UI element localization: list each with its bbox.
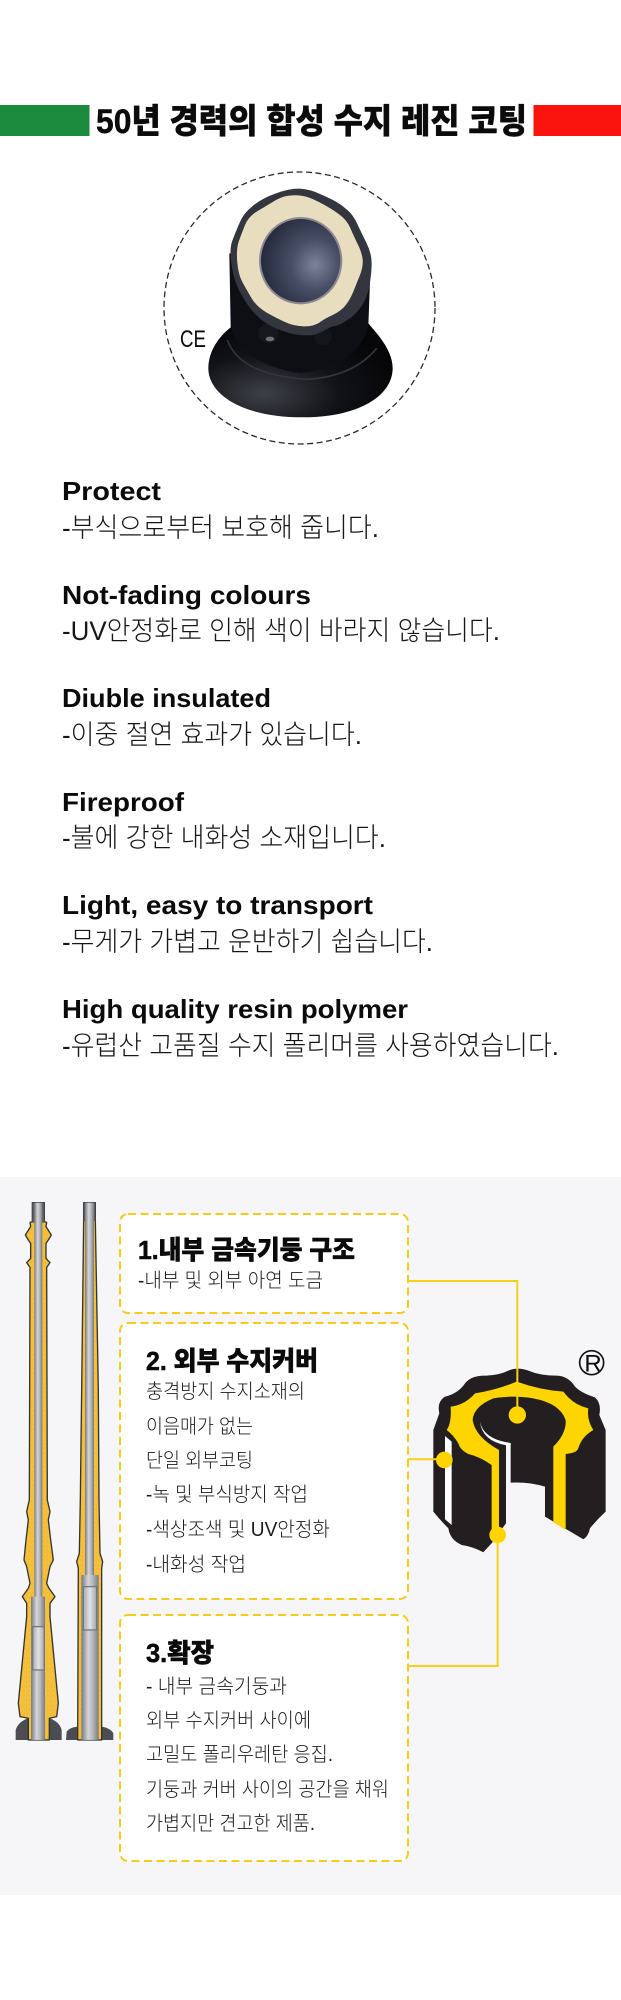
callout box 2: outer resin cover: [120, 1323, 408, 1599]
registered mark: [580, 1351, 604, 1375]
feature: Light, easy to transport: -무게가 가볍고 운반하기 쉽습니다.: [62, 927, 433, 957]
feature: Protect: -부식으로부터 보호해 줍니다.: [62, 513, 379, 543]
CE mark: CE: [180, 326, 206, 353]
feature: Light, easy to transport: [62, 890, 433, 957]
callout box 2: outer resin cover: 이음매가 없는: [146, 1415, 253, 1438]
feature: Light, easy to transport: Light, easy to transport: [62, 890, 373, 920]
feature: Not-fading colours: -UV안정화로 인해 색이 바라지 않습니다.: [62, 616, 500, 646]
callout box 2: outer resin cover: -내화성 작업: [146, 1553, 246, 1576]
callout box 3: expansion: [120, 1615, 408, 1861]
callout box 3: expansion: 고밀도 폴리우레탄 응집.: [146, 1743, 333, 1766]
callout box 1: inner metal column: -내부 및 외부 아연 도금: [138, 1269, 323, 1292]
feature list: [62, 476, 559, 1061]
poles illustration: [16, 1203, 113, 1740]
callout box 2: outer resin cover: 2. 외부 수지커버: [146, 1346, 318, 1376]
ornate pole: [16, 1203, 62, 1740]
white gaps: [480, 1422, 511, 1445]
feature: Not-fading colours: [62, 580, 500, 646]
callout box 3: expansion: 외부 수지커버 사이에: [146, 1709, 311, 1732]
icon: pole cross-section logo with connector lines: [407, 1281, 606, 1666]
feature: Fireproof: Fireproof: [62, 787, 184, 817]
dashed circle: [164, 172, 435, 444]
callout box 3: expansion: 기둥과 커버 사이의 공간을 채워: [146, 1778, 389, 1801]
callout box 3: expansion: - 내부 금속기둥과: [146, 1675, 287, 1698]
header bar: red stripe: [534, 105, 621, 136]
callout box 2: outer resin cover: -녹 및 부식방지 작업: [146, 1483, 308, 1506]
feature: Fireproof: -불에 강한 내화성 소재입니다.: [62, 823, 386, 853]
title: 50년 경력의 합성 수지 레진 코팅: [96, 103, 527, 141]
feature: Diuble insulated: [62, 683, 362, 750]
feature: High quality resin polymer: High quality resin polymer: [62, 994, 408, 1024]
tapered pole: [66, 1203, 113, 1740]
yellow resin ring: [447, 1382, 593, 1533]
feature: Protect: Protect: [62, 476, 161, 506]
connector lines and dots: [407, 1281, 517, 1666]
header bar: green stripe: [0, 105, 90, 136]
product photo: resin coated pole base in dashed circle: [164, 172, 435, 444]
feature: High quality resin polymer: -유럽산 고품질 수지 폴리머를 사용하였습니다.: [62, 1031, 559, 1061]
feature: Diuble insulated: -이중 절연 효과가 있습니다.: [62, 720, 362, 750]
callout box 3: expansion: 가볍지만 견고한 제품.: [146, 1812, 315, 1835]
callout box 2: outer resin cover: 충격방지 수지소재의: [146, 1380, 305, 1403]
callout box 1: inner metal column: [120, 1214, 408, 1313]
feature: Protect: [62, 476, 379, 543]
icon: pole cross-section logo with connector lines: R: [584, 1350, 602, 1377]
callout box 3: expansion: 3.확장: [146, 1638, 214, 1668]
feature: High quality resin polymer: [62, 994, 559, 1061]
black body: [433, 1369, 606, 1552]
feature: Fireproof: [62, 787, 386, 853]
pole base cross-section: [208, 189, 393, 417]
callout box 2: outer resin cover: -색상조색 및 UV안정화: [146, 1518, 330, 1541]
panel: structure diagram background: [0, 1177, 621, 1895]
callout box 1: inner metal column: 1.내부 금속기둥 구조: [138, 1235, 355, 1265]
feature: Not-fading colours: Not-fading colours: [62, 580, 311, 610]
callout box 2: outer resin cover: 단일 외부코팅: [146, 1449, 253, 1472]
feature: Diuble insulated: Diuble insulated: [62, 683, 271, 713]
